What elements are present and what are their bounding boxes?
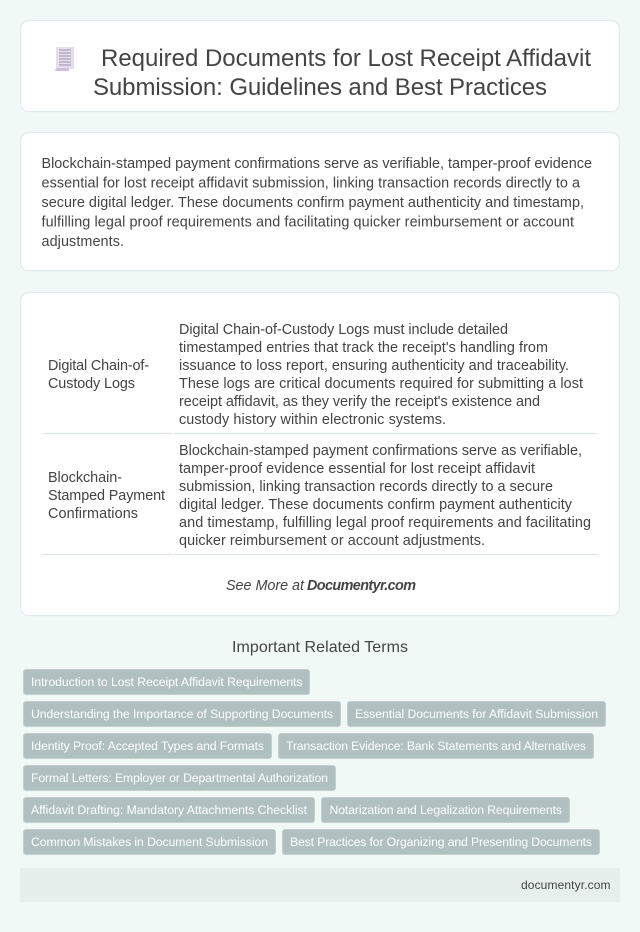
tag: Understanding the Importance of Supporting Documents (31, 707, 333, 721)
title (93, 45, 591, 101)
row description: and timestamp, fulfilling legal proof requirements and facilitating (179, 515, 591, 531)
row description: issuance to loss report, ensuring authenticity and traceability. (179, 358, 569, 374)
footer: documentyr.com (521, 878, 610, 892)
row label: Blockchain- (48, 470, 122, 486)
tag (24, 830, 276, 854)
row label: Digital Chain-of- (48, 358, 149, 374)
tag: Affidavit Drafting: Mandatory Attachments Checklist (31, 803, 308, 817)
tag (24, 798, 314, 822)
tag: Common Mistakes in Document Submission (31, 835, 268, 849)
see more link (226, 578, 416, 594)
see more link: See More at (226, 578, 305, 594)
intro paragraph: essential for lost receipt affidavit submission, linking transaction records directly to a (42, 176, 580, 192)
tag: Transaction Evidence: Bank Statements and Alternatives (286, 739, 586, 753)
panel: introduction (21, 133, 619, 271)
tag (282, 830, 600, 854)
row description (179, 443, 591, 549)
footer (20, 868, 620, 902)
row label: Stamped Payment (48, 488, 165, 504)
tag (24, 766, 336, 790)
tag (24, 734, 272, 758)
tag (24, 670, 310, 694)
row description: receipt affidavit, as they verify the receipt's existence and (179, 394, 540, 410)
row label (48, 358, 149, 392)
row description: quicker reimbursement or account adjustments. (179, 533, 485, 549)
row description: submission, linking transaction records directly to a secure (179, 479, 553, 495)
see more link: Documentyr.com (307, 578, 416, 594)
tag (278, 734, 594, 758)
row description (179, 322, 583, 428)
row label: Confirmations (48, 506, 138, 522)
related terms tags (24, 670, 606, 854)
heading: important related terms: Important Related Terms (232, 639, 408, 656)
intro paragraph: fulfilling legal proof requirements and facilitating quicker reimbursement or account (42, 214, 574, 230)
title: Submission: Guidelines and Best Practices (93, 74, 547, 101)
panel: header (21, 21, 619, 112)
tag: Notarization and Legalization Requirements (330, 803, 562, 817)
row label (48, 470, 165, 522)
panel: documents table (21, 293, 619, 616)
table row: blockchain-stamped payment confirmations (48, 443, 591, 549)
tag (24, 702, 340, 726)
row label: Custody Logs (48, 376, 135, 392)
row description: These logs are critical documents required for submitting a lost (179, 376, 583, 392)
tag: Formal Letters: Employer or Departmental Authorization (31, 771, 328, 785)
row description: custody history within electronic systems. (179, 412, 446, 428)
row description: Blockchain-stamped payment confirmations serve as verifiable, (179, 443, 582, 459)
intro paragraph (42, 156, 592, 250)
tag: Identity Proof: Accepted Types and Formats (31, 739, 264, 753)
tag (348, 702, 606, 726)
tag (322, 798, 570, 822)
tag: Introduction to Lost Receipt Affidavit Requirements (31, 675, 302, 689)
intro paragraph: secure digital ledger. These documents confirm payment authenticity and timestamp, (42, 195, 584, 211)
row description: timestamped entries that track the receipt's handling from (179, 340, 548, 356)
intro paragraph: adjustments. (42, 234, 124, 250)
title: Required Documents for Lost Receipt Affidavit (101, 45, 591, 72)
row description: Digital Chain-of-Custody Logs must include detailed (179, 322, 508, 338)
table row: digital chain-of-custody logs (48, 322, 583, 428)
tag: Best Practices for Organizing and Presenting Documents (290, 835, 592, 849)
icon: receipt document (54, 47, 74, 71)
intro paragraph: Blockchain-stamped payment confirmations serve as verifiable, tamper-proof evidence (42, 156, 592, 172)
row description: digital ledger. These documents confirm payment authenticity (179, 497, 573, 513)
tag: Essential Documents for Affidavit Submission (355, 707, 598, 721)
row description: tamper-proof evidence essential for lost receipt affidavit (179, 461, 535, 477)
